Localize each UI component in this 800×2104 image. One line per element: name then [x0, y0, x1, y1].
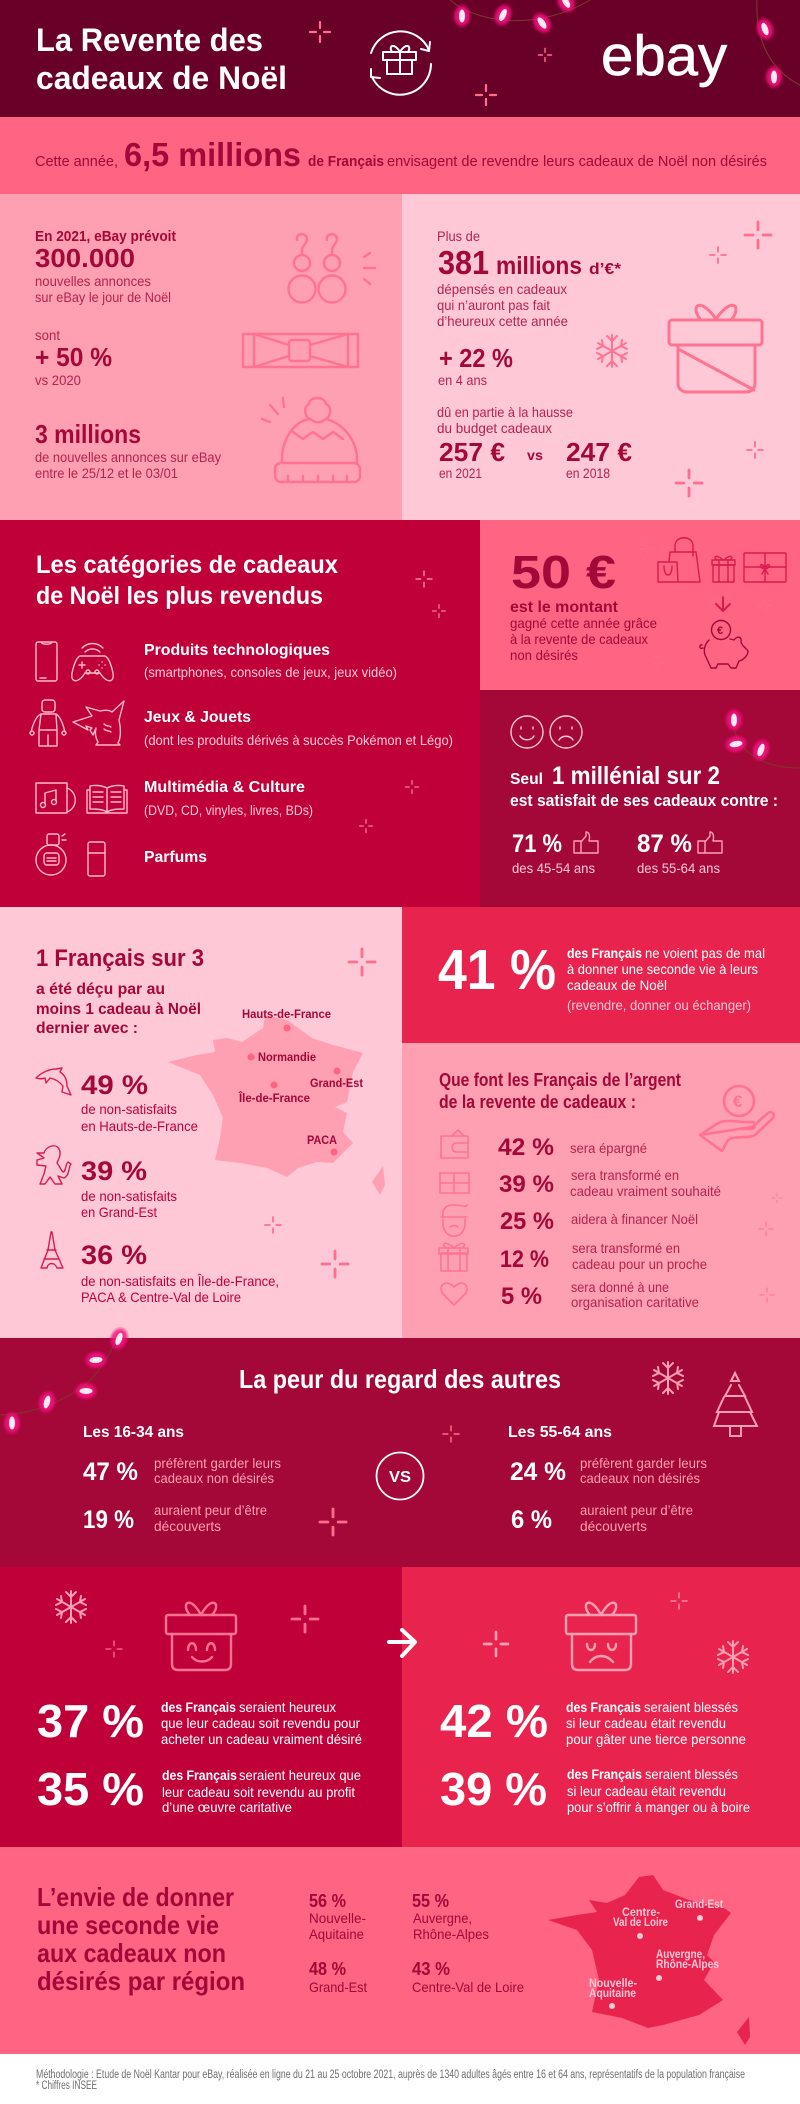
- spending text: du budget cadeaux: [437, 420, 552, 436]
- icon: earrings: [288, 234, 375, 302]
- spending text: Plus de: [437, 228, 480, 244]
- sparkles: [360, 571, 446, 832]
- title: [36, 22, 287, 96]
- categories list: (dont les produits dérivés à succès Pokémon et Légo): [144, 732, 453, 748]
- listings text: En 2021, eBay prévoit: [35, 229, 176, 245]
- hurt stats: seraient blessés: [644, 1699, 738, 1715]
- icon: Eiffel tower: [41, 1232, 63, 1268]
- map labels: Aquitaine: [589, 1988, 636, 2000]
- icon: small gift: [712, 556, 735, 582]
- panel: desire by region: [0, 1847, 800, 2054]
- listings text: 3 millions: [35, 419, 141, 449]
- VS badge: [376, 1452, 424, 1500]
- regional stats: en Grand-Est: [81, 1204, 157, 1220]
- regional stats: 36 %: [81, 1240, 147, 1270]
- heading: de la revente de cadeaux :: [439, 1092, 636, 1112]
- regional stats: de non-satisfaits en Île-de-France,: [81, 1273, 279, 1289]
- map labels: Normandie: [258, 1052, 316, 1064]
- icon: shopping bags: [658, 538, 700, 582]
- usage rows: cadeau pour un proche: [572, 1256, 707, 1272]
- spending text: en 2021: [439, 465, 482, 481]
- panel: hurt: [402, 1567, 800, 1847]
- column: 16-34: 19 %: [83, 1506, 134, 1534]
- heading: [36, 945, 204, 1037]
- spending text: 381: [438, 244, 489, 281]
- listings text: sont: [35, 327, 60, 343]
- column: 55-64: 24 %: [510, 1458, 566, 1486]
- hurt stats: [440, 1695, 750, 1815]
- heading: Les catégories de cadeaux: [36, 551, 338, 579]
- icon: snowflake: [56, 1591, 86, 1623]
- map labels: Auvergne,: [656, 1949, 705, 1961]
- usage rows: sera épargné: [570, 1140, 647, 1156]
- spending text: d’heureux cette année: [437, 313, 568, 329]
- icon: gift with circular arrows: [371, 31, 431, 95]
- spending text: + 22 %: [439, 343, 513, 373]
- header sparkles: [310, 22, 552, 105]
- regional stats: de non-satisfaits: [81, 1188, 177, 1204]
- listings text: + 50 %: [35, 342, 112, 372]
- column: 16-34: préfèrent garder leurs: [154, 1455, 281, 1471]
- icon: lion: [37, 1146, 71, 1184]
- column: 55-64: préfèrent garder leurs: [580, 1455, 707, 1471]
- usage rows: 12 %: [500, 1246, 549, 1273]
- icon: sad gift: [566, 1603, 636, 1670]
- regional percentages: 56 %: [309, 1891, 346, 1911]
- millennial text: 87 %: [637, 830, 692, 858]
- happy stats: 37 %: [37, 1695, 144, 1747]
- hurt stats: pour s’offrir à manger ou à boire: [567, 1799, 750, 1815]
- regional percentages: Aquitaine: [309, 1926, 364, 1942]
- usage rows: sera transformé en: [571, 1167, 679, 1183]
- amount text: non désirés: [510, 647, 578, 663]
- panel: 50 euros: [480, 520, 800, 690]
- sparkles: [265, 949, 375, 1277]
- map labels: Val de Loire: [613, 1917, 668, 1929]
- icon: winter hat: [262, 398, 360, 482]
- icon: music album: [36, 783, 75, 813]
- categories list: (smartphones, consoles de jeux, jeux vidéo): [144, 664, 397, 680]
- icon: cartoon creature: [73, 701, 124, 745]
- banner sentence: [35, 136, 767, 173]
- amount text: 50 €: [511, 546, 616, 598]
- column: 55-64: auraient peur d’être: [580, 1502, 693, 1518]
- listings text: vs 2020: [35, 372, 81, 388]
- heading: a été déçu par au: [36, 981, 165, 998]
- happy stats: leur cadeau soit revendu au profit: [162, 1784, 355, 1800]
- sparkles: [484, 1593, 687, 1656]
- panel: millennials: [480, 690, 800, 907]
- happy stats: des Français: [162, 1767, 237, 1783]
- regional percentages: 55 %: [412, 1891, 449, 1911]
- panel: eBay listings: [0, 194, 402, 520]
- spending text: vs: [527, 447, 543, 463]
- column: 16-34: [83, 1424, 281, 1534]
- spending text: en 4 ans: [438, 372, 487, 388]
- hurt stats: si leur cadeau était revendu: [566, 1715, 726, 1731]
- usage rows: organisation caritative: [571, 1294, 699, 1310]
- panel: most resold categories: [0, 520, 480, 907]
- map labels: Rhône-Alpes: [656, 1959, 719, 1971]
- heading: Que font les Français de l’argent: [439, 1070, 681, 1090]
- heading: de Noël les plus revendus: [36, 582, 323, 610]
- usage rows: sera transformé en: [572, 1240, 680, 1256]
- categories list: [144, 642, 453, 866]
- map labels: Nouvelle-: [589, 1978, 637, 1990]
- banner sentence: de Français: [308, 153, 384, 170]
- regional percentages: Rhône-Alpes: [413, 1926, 489, 1942]
- regional stats: [81, 1070, 279, 1305]
- hurt stats: des Français: [567, 1766, 642, 1782]
- banner sentence: envisagent de revendre leurs cadeaux de Noël non désirés: [387, 153, 767, 170]
- usage rows: aidera à financer Noël: [571, 1211, 698, 1227]
- title: cadeaux de Noël: [36, 60, 287, 96]
- panel: what the French do with the money: [402, 1043, 800, 1338]
- icon: hand with euro coin: [700, 1086, 774, 1151]
- hurt stats: 42 %: [440, 1695, 548, 1747]
- footer: methodology: [36, 2069, 745, 2092]
- categories list: (DVD, CD, vinyles, livres, BDs): [144, 802, 313, 818]
- icon: dolphin: [36, 1068, 71, 1095]
- big number: 41 %: [438, 938, 556, 1002]
- happy stats: seraient heureux que: [239, 1767, 361, 1783]
- column: 55-64: cadeaux non désirés: [580, 1470, 700, 1486]
- regional percentages: Centre-Val de Loire: [412, 1979, 524, 1995]
- banner sentence: 6,5 millions: [124, 136, 301, 173]
- column: 16-34: Les 16-34 ans: [83, 1424, 184, 1441]
- regional percentages: Nouvelle-: [309, 1910, 366, 1926]
- icon: heart: [441, 1283, 467, 1305]
- heading: moins 1 cadeau à Noël: [36, 1001, 201, 1018]
- happy stats: des Français: [161, 1699, 236, 1715]
- heading: désirés par région: [37, 1966, 245, 1996]
- happy stats: d’une œuvre caritative: [162, 1799, 292, 1815]
- spending text: qui n’auront pas fait: [437, 297, 550, 313]
- map labels: Grand-Est: [310, 1078, 363, 1090]
- column: 55-64: Les 55-64 ans: [508, 1424, 612, 1441]
- usage rows: 39 %: [499, 1171, 554, 1198]
- arrow: happy to hurt: [389, 1630, 415, 1656]
- column: 55-64: [508, 1424, 707, 1534]
- heading: aux cadeaux non: [37, 1938, 226, 1968]
- panel: disappointed French: [0, 907, 402, 1338]
- column: 16-34: 47 %: [83, 1458, 138, 1486]
- icon: snowflake: [718, 1641, 748, 1673]
- icons: happy and sad faces: [511, 716, 582, 748]
- icon: building toy figure: [30, 700, 66, 746]
- panel: millennials: des 45-54 ans: [512, 860, 595, 876]
- column: 16-34: cadeaux non désirés: [154, 1470, 274, 1486]
- description: des Français: [567, 945, 642, 961]
- panel: millennials: des 55-64 ans: [637, 860, 720, 876]
- happy stats: 35 %: [37, 1763, 144, 1815]
- column: 55-64: 6 %: [511, 1506, 552, 1534]
- categories list: Jeux & Jouets: [144, 709, 251, 726]
- icon: perfume bottle: [36, 834, 66, 875]
- heading: 1 Français sur 3: [36, 945, 204, 972]
- string lights: left: [0, 1323, 133, 1436]
- usage rows: sera donné à une: [571, 1279, 669, 1295]
- map labels: [238, 1009, 363, 1147]
- map labels: Hauts-de-France: [242, 1009, 331, 1021]
- icon: snowflake: [597, 335, 627, 367]
- icon: wallet: [441, 1130, 468, 1158]
- icon: crossed gift: [669, 305, 762, 392]
- spending text: dû en partie à la hausse: [437, 404, 573, 420]
- map of France: [168, 1009, 385, 1195]
- millennial text: 1 millénial sur 2: [552, 762, 720, 790]
- map markers: [609, 1915, 703, 2009]
- spending text: dépensés en cadeaux: [437, 281, 567, 297]
- map markers: [248, 1024, 340, 1156]
- description: [567, 945, 765, 1013]
- icon: Christmas tree: [714, 1373, 757, 1436]
- regional percentages: Grand-Est: [309, 1979, 367, 1995]
- regional stats: en Hauts-de-France: [81, 1118, 198, 1134]
- listings text: nouvelles annonces: [35, 273, 151, 289]
- happy stats: [37, 1695, 362, 1815]
- amount text: gagné cette année grâce: [510, 615, 657, 631]
- amount text: à la revente de cadeaux: [510, 631, 648, 647]
- description: à donner une seconde vie à leurs: [567, 961, 758, 977]
- map of France: [548, 1875, 750, 2045]
- description: (revendre, donner ou échanger): [567, 997, 751, 1013]
- spending text: 257 €: [439, 437, 505, 467]
- happy stats: seraient heureux: [239, 1699, 336, 1715]
- categories list: Produits technologiques: [144, 642, 330, 659]
- regional percentages: 43 %: [412, 1959, 450, 1979]
- panel: banner: [0, 117, 800, 194]
- millennial text: Seul: [510, 771, 543, 788]
- heading: [439, 1070, 681, 1112]
- string lights: top: [450, 0, 800, 90]
- heading: dernier avec :: [36, 1020, 138, 1037]
- icon: snowflake: [653, 1362, 683, 1394]
- heading: La peur du regard des autres: [239, 1364, 561, 1394]
- usage rows: 42 %: [498, 1134, 554, 1161]
- happy stats: que leur cadeau soit revendu pour: [161, 1715, 360, 1731]
- panel: happy: [0, 1567, 402, 1847]
- millennial text: [510, 762, 778, 858]
- sparkles: [640, 542, 772, 670]
- logo: ebay: ebay: [601, 24, 728, 88]
- map labels: [589, 1899, 723, 2000]
- usage rows: [498, 1134, 721, 1310]
- icon: hand with euro coin: €: [733, 1092, 743, 1111]
- icon: open book: [87, 785, 127, 813]
- regional percentages: Auvergne,: [413, 1910, 472, 1926]
- amount text: est le montant: [510, 599, 619, 616]
- icon: Santa: [441, 1205, 467, 1236]
- regional stats: 39 %: [81, 1156, 147, 1186]
- regional percentages: [309, 1891, 524, 1995]
- panel: fear of others' judgment: [0, 1323, 800, 1567]
- regional stats: PACA & Centre-Val de Loire: [81, 1289, 241, 1305]
- millennial text: 71 %: [512, 830, 562, 858]
- hurt stats: des Français: [566, 1699, 641, 1715]
- footer: methodology: * Chiffres INSEE: [36, 2080, 97, 2092]
- icon: flat gift: [440, 1173, 469, 1193]
- usage rows: 25 %: [500, 1208, 554, 1235]
- icon: happy gift: [166, 1603, 236, 1670]
- regional stats: de non-satisfaits: [81, 1101, 177, 1117]
- usage rows: cadeau vraiment souhaité: [570, 1183, 721, 1199]
- happy stats: acheter un cadeau vraiment désiré: [161, 1731, 362, 1747]
- spending text: en 2018: [566, 465, 610, 481]
- string lights: millennials: [721, 707, 800, 768]
- panel: 41 percent: [402, 907, 800, 1043]
- sparkles: [676, 222, 771, 496]
- sparkles: [106, 1606, 318, 1657]
- heading: [36, 551, 338, 610]
- icon: thumb up: [698, 832, 722, 853]
- categories list: Parfums: [144, 849, 207, 866]
- icon: game controller: [72, 644, 113, 681]
- map labels: Centre-: [622, 1907, 660, 1919]
- map labels: PACA: [307, 1135, 337, 1147]
- icon: smartphone: [36, 642, 57, 681]
- description: cadeaux de Noël: [567, 977, 667, 993]
- icon: piggy bank: €: [717, 625, 723, 637]
- icon: thumb up: [574, 832, 598, 853]
- listings text: [35, 229, 221, 481]
- map labels: Île-de-France: [238, 1092, 310, 1105]
- listings text: sur eBay le jour de Noël: [35, 289, 171, 305]
- banner sentence: Cette année,: [35, 153, 118, 170]
- icon: piggy bank: [700, 620, 748, 668]
- icon: arrow down: [716, 597, 730, 611]
- sparkles: [759, 1193, 782, 1302]
- usage rows: 5 %: [501, 1283, 542, 1310]
- heading: une seconde vie: [37, 1910, 219, 1940]
- map labels: Grand-Est: [675, 1899, 723, 1911]
- listings text: 300.000: [35, 243, 135, 273]
- spending text: d’€*: [589, 261, 622, 278]
- icon: deodorant: [88, 842, 105, 876]
- column: 16-34: auraient peur d’être: [154, 1502, 267, 1518]
- hurt stats: 39 %: [440, 1763, 547, 1815]
- icon: flat gift: [744, 553, 786, 582]
- spending text: [437, 228, 632, 481]
- column: 55-64: découverts: [580, 1518, 647, 1534]
- categories list: Multimédia & Culture: [144, 779, 305, 796]
- heading: L’envie de donner: [37, 1882, 234, 1912]
- panel: spending: [402, 194, 800, 520]
- amount text: [510, 546, 657, 663]
- VS badge: VS: [389, 1469, 411, 1486]
- hurt stats: seraient blessés: [645, 1766, 738, 1782]
- column: 16-34: découverts: [154, 1518, 221, 1534]
- title: La Revente des: [36, 22, 263, 58]
- panel: header: [0, 0, 800, 117]
- listings text: de nouvelles annonces sur eBay: [35, 449, 221, 465]
- hurt stats: pour gâter une tierce personne: [566, 1731, 746, 1747]
- hurt stats: si leur cadeau était revendu: [567, 1783, 726, 1799]
- spending text: 247 €: [566, 437, 632, 467]
- spending text: millions: [496, 252, 582, 280]
- heading: [37, 1882, 245, 1996]
- regional stats: 49 %: [81, 1070, 148, 1100]
- icon: wrapped gift: [439, 1243, 468, 1271]
- description: ne voient pas de mal: [645, 945, 765, 961]
- millennial text: est satisfait de ses cadeaux contre :: [510, 791, 778, 810]
- listings text: entre le 25/12 et le 03/01: [35, 465, 178, 481]
- icon: bow: [243, 334, 358, 367]
- regional percentages: 48 %: [309, 1959, 346, 1979]
- sparkles: [320, 1426, 459, 1535]
